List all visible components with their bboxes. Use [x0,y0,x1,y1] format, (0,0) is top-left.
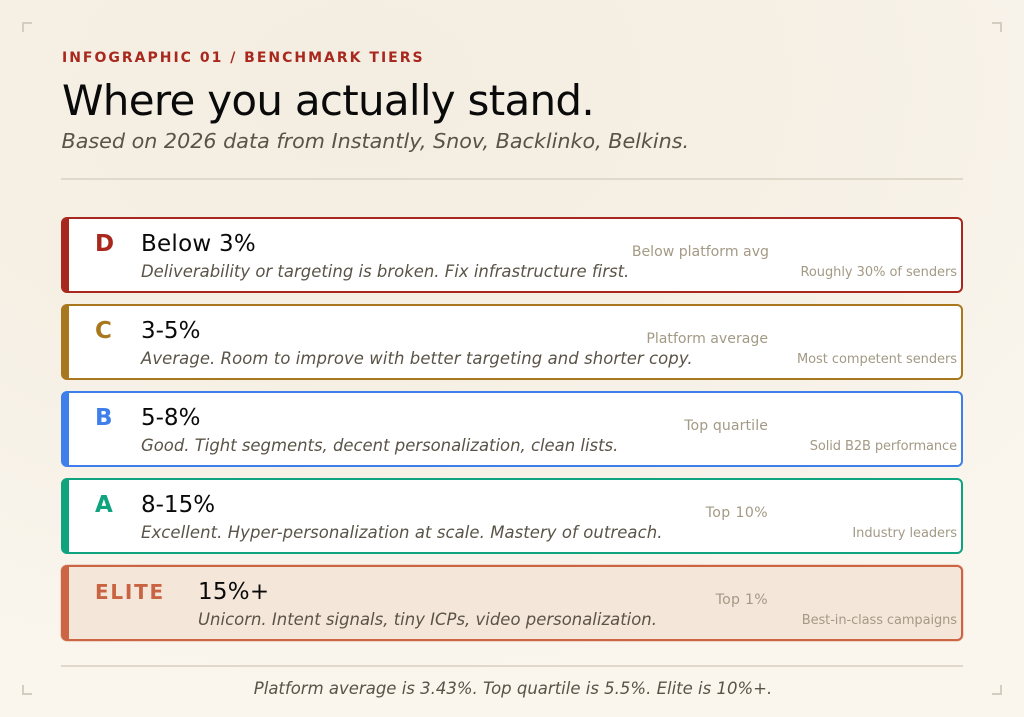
description: Excellent. Hyper-personalization at scale. Mastery of outreach. [141,523,662,542]
percentile label: Top 10% [706,505,768,521]
note: Roughly 30% of senders [800,265,957,280]
note: Solid B2B performance [810,439,957,454]
grade label Elite: ELITE [95,580,165,604]
title: Where you actually stand. [62,76,594,125]
description: Good. Tight segments, decent personalization, clean lists. [141,436,618,455]
panel: tier B [61,391,963,467]
subtitle: Based on 2026 data from Instantly, Snov, Backlinko, Belkins. [62,129,689,153]
corner mark: top left [22,22,32,32]
panel: tier Elite [61,565,963,641]
grade letter D: D [95,231,114,257]
percentile label: Top quartile [684,418,768,434]
corner mark: top right [992,22,1002,32]
note: Industry leaders [852,526,957,541]
grade letter C: C [95,318,112,344]
panel: tier A [61,478,963,554]
description: Unicorn. Intent signals, tiny ICPs, video personalization. [198,610,657,629]
corner mark: bottom left [22,685,32,695]
range: 3-5% [141,318,200,344]
percentile label: Platform average [646,331,768,347]
range: Below 3% [141,231,256,257]
note: Best-in-class campaigns [802,613,957,628]
range: 5-8% [141,405,200,431]
grade letter B: B [95,405,113,431]
corner mark: bottom right [992,685,1002,695]
percentile label: Below platform avg [632,244,769,260]
footer note: Platform average is 3.43%. Top quartile is 5.5%. Elite is 10%+. [254,679,772,698]
panel: tier C [61,304,963,380]
note: Most competent senders [797,352,957,367]
range: 15%+ [198,579,269,605]
percentile label: Top 1% [716,592,768,608]
description: Average. Room to improve with better targeting and shorter copy. [141,349,693,368]
grade letter A: A [95,492,113,518]
panel: tier D [61,217,963,293]
eyebrow heading: INFOGRAPHIC 01 / BENCHMARK TIERS [62,50,425,66]
description: Deliverability or targeting is broken. Fix infrastructure first. [141,262,629,281]
range: 8-15% [141,492,215,518]
